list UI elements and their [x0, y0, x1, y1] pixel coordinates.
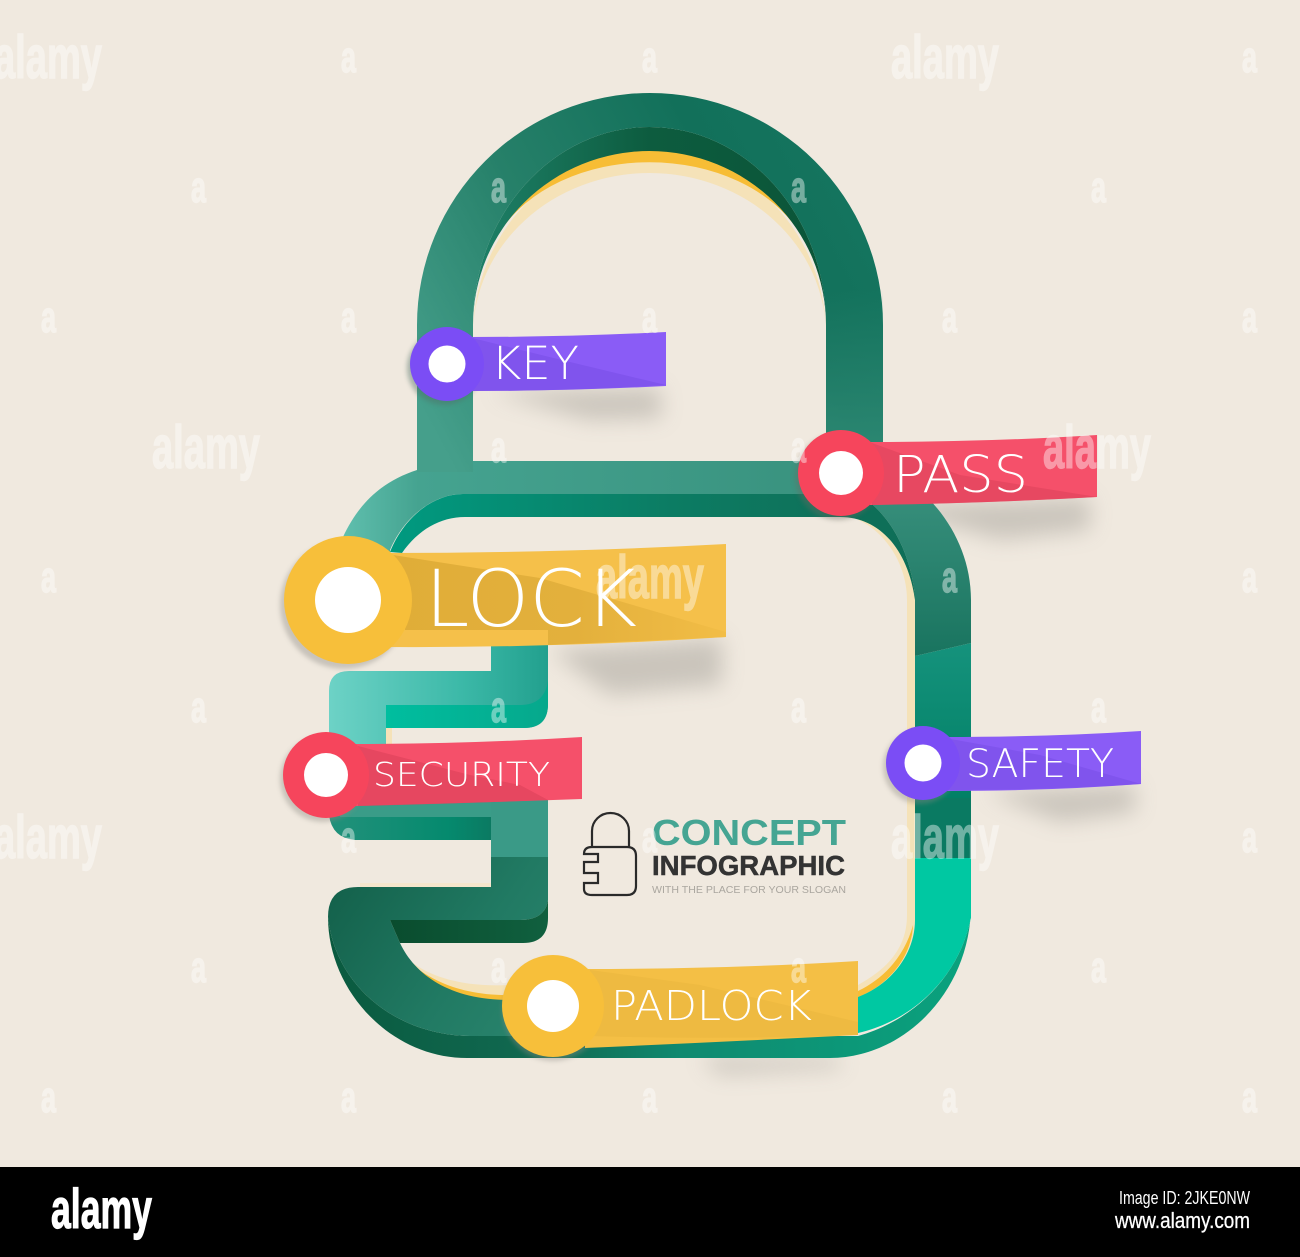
watermarks: a	[191, 683, 206, 732]
watermarks: a	[341, 553, 356, 602]
watermarks: a	[791, 163, 806, 212]
watermarks: a	[642, 293, 657, 342]
security pin shadow	[280, 736, 366, 822]
security ribbon	[355, 737, 582, 806]
key ribbon	[470, 332, 666, 391]
top right corner	[826, 461, 971, 656]
inner pale body edge	[390, 517, 915, 1000]
safety text: SAFETY	[966, 742, 1114, 787]
watermarks: a	[41, 553, 56, 602]
yellow body edge	[390, 925, 913, 1001]
key pin shadow	[407, 331, 481, 405]
watermarks: alamy	[891, 24, 999, 91]
label: lock	[280, 536, 726, 669]
top right corner underside	[800, 494, 915, 600]
key notch lower band	[328, 857, 548, 1036]
crossbar underside	[390, 494, 860, 553]
watermarks: a	[1091, 943, 1106, 992]
watermarks: a	[1242, 293, 1257, 342]
watermarks: alamy	[596, 544, 704, 611]
right lower bright section	[858, 857, 971, 1033]
security text: SECURITY	[373, 755, 550, 794]
watermarks: a	[41, 1073, 56, 1122]
safety ribbon	[945, 731, 1141, 791]
label: key	[407, 327, 666, 405]
right middle section	[915, 643, 971, 800]
icon: small padlock	[584, 813, 636, 895]
pass pin shadow	[795, 434, 881, 520]
right section under safety	[915, 798, 971, 858]
ribbon drop shadows	[490, 388, 1135, 1074]
watermarks: a	[341, 33, 356, 82]
label: pass	[795, 430, 1097, 520]
shackle front	[417, 93, 883, 480]
watermarks: a	[642, 33, 657, 82]
watermarks: a	[41, 293, 56, 342]
watermarks: alamy	[1043, 414, 1151, 481]
key notch middle band	[329, 790, 548, 892]
image id: Image ID: 2JKE0NW	[1119, 1188, 1250, 1208]
watermarks: a	[642, 813, 657, 862]
watermarks: alamy	[152, 414, 260, 481]
watermarks: a	[491, 163, 506, 212]
padlock ribbon	[585, 961, 858, 1048]
key pin	[410, 327, 484, 401]
padlock pin	[502, 955, 604, 1057]
footer bar	[0, 1167, 1300, 1257]
watermarks: a	[642, 1073, 657, 1122]
watermarks: a	[191, 163, 206, 212]
watermarks: a	[942, 1073, 957, 1122]
crossbar and upper left curve	[343, 461, 830, 640]
security pin	[283, 732, 369, 818]
safety pin	[886, 726, 960, 800]
lock ribbon	[385, 544, 726, 647]
watermarks: a	[491, 943, 506, 992]
lock pin shadow	[280, 541, 408, 669]
pass text: PASS	[893, 446, 1028, 505]
label: padlock	[502, 955, 858, 1061]
watermarks: a	[191, 943, 206, 992]
watermarks: alamy	[891, 804, 999, 871]
watermarks: a	[1091, 683, 1106, 732]
watermarks: a	[341, 813, 356, 862]
watermarks: a	[341, 1073, 356, 1122]
lock pin	[284, 536, 412, 664]
watermarks: a	[341, 293, 356, 342]
right leg lower tint	[826, 290, 883, 480]
watermarks: a	[1242, 1073, 1257, 1122]
watermarks: a	[1242, 553, 1257, 602]
watermarks: a	[1242, 33, 1257, 82]
watermarks: a	[942, 293, 957, 342]
shackle underside	[473, 127, 826, 325]
watermarks: a	[491, 423, 506, 472]
watermarks: a	[1242, 813, 1257, 862]
heading: infographic: INFOGRAPHIC	[652, 850, 845, 881]
padlock text: PADLOCK	[611, 982, 812, 1030]
slogan: WITH THE PLACE FOR YOUR SLOGAN	[652, 885, 846, 896]
concept logo	[584, 812, 846, 896]
footer logo: alamy	[51, 1177, 152, 1240]
key notch upper band	[329, 640, 548, 760]
watermarks: a	[791, 943, 806, 992]
watermarks: a	[791, 683, 806, 732]
watermarks: a	[942, 553, 957, 602]
bottom side shading	[328, 905, 971, 1058]
watermarks: a	[491, 683, 506, 732]
heading: concept: CONCEPT	[652, 812, 846, 853]
label: safety	[883, 726, 1141, 804]
safety pin shadow	[883, 730, 957, 804]
lock text: LOCK	[425, 555, 637, 645]
label: security	[280, 732, 582, 822]
padlock icon: main outline	[328, 93, 971, 1058]
padlock pin shadow	[502, 959, 604, 1061]
pass pin	[798, 430, 884, 516]
pass ribbon	[870, 435, 1097, 505]
key text: KEY	[491, 337, 579, 390]
watermarks: a	[791, 423, 806, 472]
website: www.alamy.com	[1114, 1208, 1250, 1233]
inner pale and yellow shackle highlight	[473, 150, 826, 335]
watermarks: a	[1091, 163, 1106, 212]
